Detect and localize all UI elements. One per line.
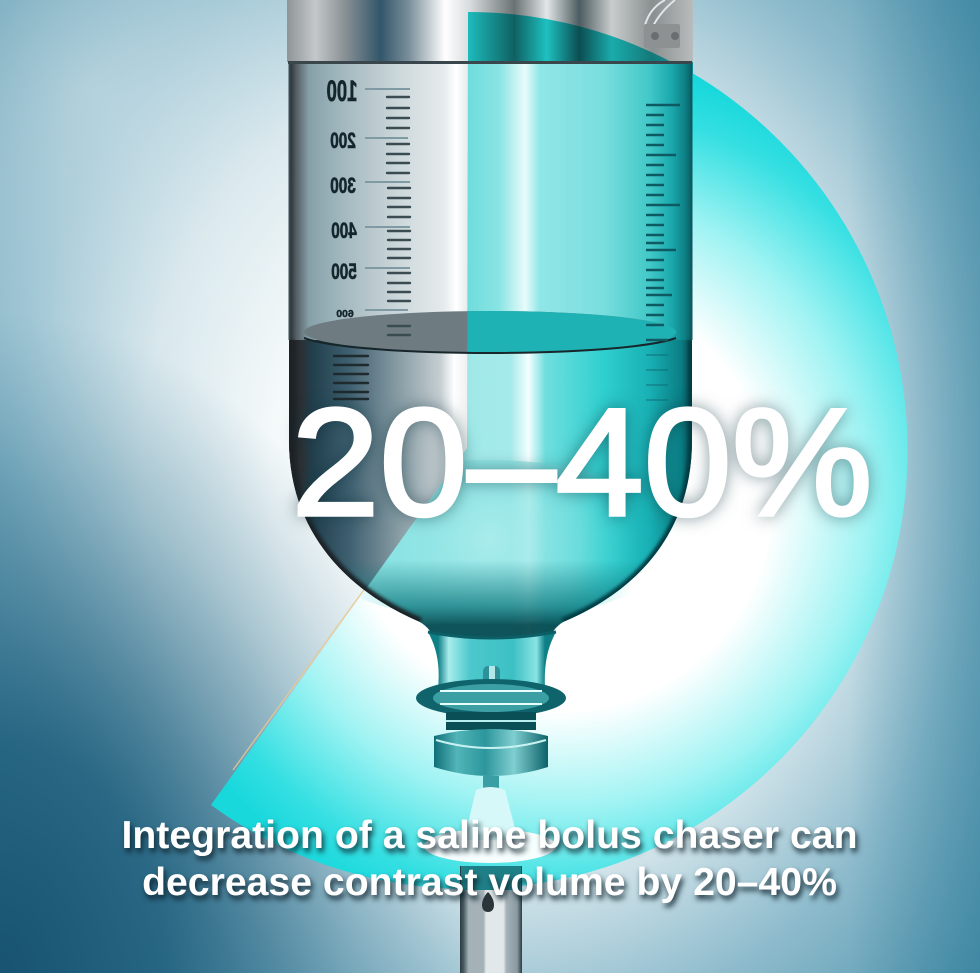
caption: decrease contrast volume by 20–40% — [142, 861, 837, 904]
submerged marks left — [334, 356, 368, 399]
neck top line — [428, 632, 556, 638]
left graduation scale — [326, 75, 410, 335]
liquid surface — [304, 311, 676, 353]
left graduation scale: 300 — [330, 174, 356, 199]
bottle steel cap — [287, 0, 693, 62]
bowl dark rim — [289, 340, 692, 622]
left graduation scale: 100 — [326, 75, 358, 108]
glass top rim — [288, 61, 692, 64]
drip tube — [460, 866, 522, 973]
upper glass grey side — [290, 64, 468, 340]
upper glass teal side — [467, 64, 690, 340]
bowl pale glow — [360, 460, 630, 618]
neck interior — [428, 632, 556, 690]
white connector cone — [424, 787, 556, 863]
teal half of bottle — [366, 64, 692, 631]
big percentage: 20–40% — [291, 376, 873, 547]
icon: drop — [482, 892, 494, 912]
sector gap line — [233, 448, 467, 770]
neck inner spike — [483, 666, 500, 746]
glass edges — [288, 62, 290, 340]
left graduation scale: 600 — [336, 308, 354, 320]
pie sector 60-70 percent — [211, 12, 908, 889]
bowl rim shading — [346, 564, 635, 682]
caption — [121, 814, 858, 904]
caption: Integration of a saline bolus chaser can — [121, 814, 858, 857]
submerged marks right — [646, 355, 668, 400]
cap teal tint — [468, 12, 693, 74]
icon: hanger bracket — [644, 0, 680, 48]
left graduation scale: 400 — [331, 219, 357, 244]
left graduation scale: 500 — [331, 260, 357, 285]
teal metal cap — [434, 729, 548, 776]
liquid grey side — [289, 340, 467, 630]
iv bottle — [287, 0, 693, 973]
glass right edge — [690, 62, 692, 340]
right graduation scale — [646, 105, 680, 340]
liquid teal side — [366, 340, 692, 631]
stem — [483, 776, 499, 792]
neck flange ring — [416, 679, 566, 730]
left graduation scale: 200 — [330, 129, 356, 154]
upper right glass corner — [468, 62, 692, 102]
